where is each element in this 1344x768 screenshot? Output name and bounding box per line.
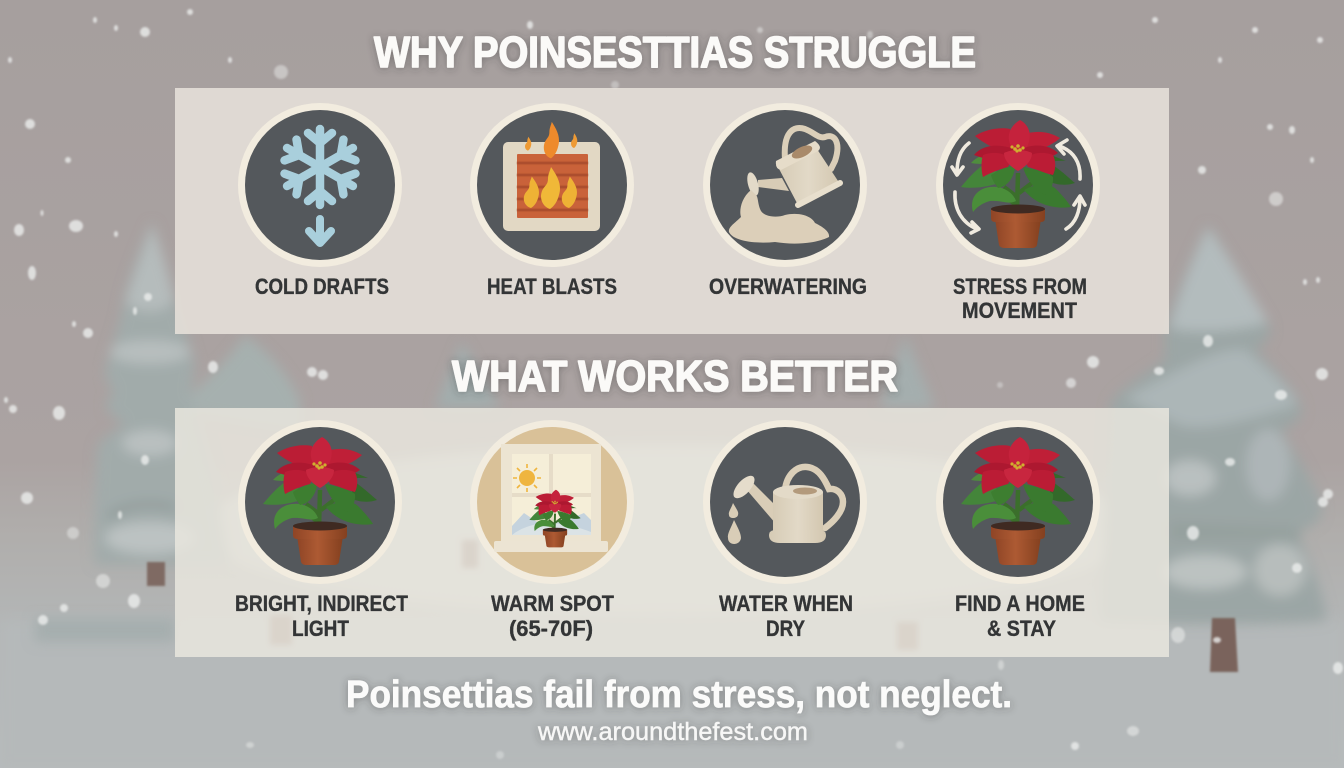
label: warm spot: WARM SPOT: [491, 591, 615, 616]
title: why poinsettias struggle: WHY POINSESTTIAS STRUGGLE: [374, 28, 976, 77]
heading: what works better: WHAT WORKS BETTER: [452, 352, 898, 401]
label: warm spot: [491, 591, 615, 641]
icon: snowflake with down arrow: [238, 103, 402, 267]
panel: what works better: [175, 408, 1169, 657]
label: find a home and stay: & STAY: [987, 616, 1056, 641]
item: warm spot: [470, 420, 634, 641]
label: water when dry: [719, 591, 853, 641]
label: stress from movement: [953, 274, 1087, 323]
label: overwatering: OVERWATERING: [709, 274, 867, 299]
tagline: Poinsettias fail from stress, not neglect.: [346, 674, 1012, 716]
label: stress from movement: MOVEMENT: [962, 298, 1077, 323]
icon: watering can with drops: [703, 420, 867, 584]
icon: potted poinsettia: [238, 420, 402, 584]
icon: poinsettia with circular arrows: [936, 103, 1100, 267]
label: bright indirect light: BRIGHT, INDIRECT: [235, 591, 408, 616]
item: cold drafts: [238, 103, 402, 299]
label: find a home and stay: FIND A HOME: [955, 591, 1085, 616]
item: overwatering: [703, 103, 867, 299]
panel: why poinsettias struggle: [175, 88, 1169, 334]
item: find a home and stay: [936, 420, 1100, 641]
website url: www.aroundthefest.com: [537, 718, 808, 746]
icon: potted poinsettia staying put: [936, 420, 1100, 584]
icon: tipped watering can with puddle: [703, 103, 867, 267]
label: bright indirect light: [235, 591, 408, 641]
icon: heater with flames: [470, 103, 634, 267]
label: heat blasts: HEAT BLASTS: [487, 274, 617, 299]
label: stress from movement: STRESS FROM: [953, 274, 1087, 299]
label: water when dry: WATER WHEN: [719, 591, 853, 616]
item: bright indirect light: [235, 420, 408, 641]
label: find a home and stay: [955, 591, 1085, 641]
label: cold drafts: COLD DRAFTS: [255, 274, 389, 299]
label: warm spot: (65-70F): [509, 616, 593, 641]
item: water when dry: [703, 420, 867, 641]
item: stress from movement: [936, 103, 1100, 323]
label: bright indirect light: LIGHT: [292, 616, 349, 641]
icon: sunny window with poinsettia: [470, 420, 634, 584]
label: water when dry: DRY: [766, 616, 805, 641]
item: heat blasts: [470, 103, 634, 299]
